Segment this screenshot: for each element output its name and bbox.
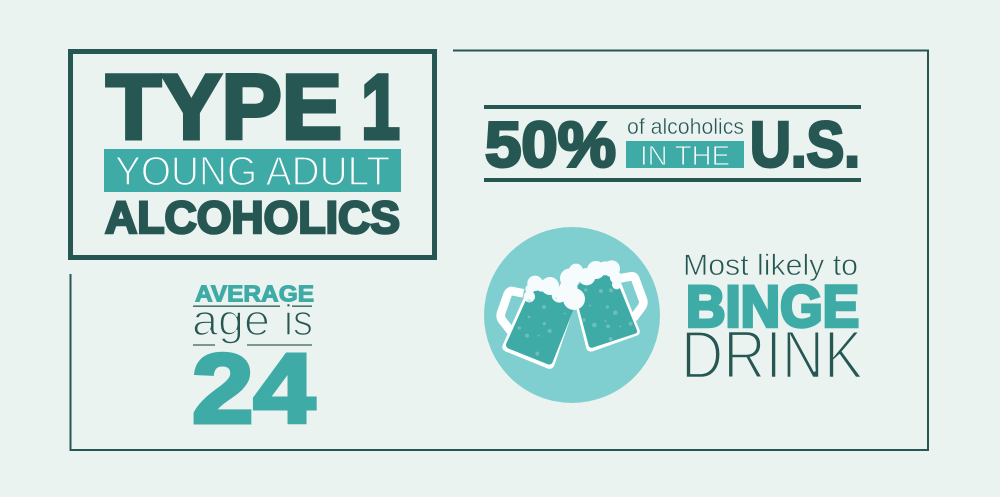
panel: average age xyxy=(192,280,315,444)
icon part: left mug xyxy=(501,287,578,369)
panel: type 1 title box xyxy=(70,52,434,258)
text: age is: is xyxy=(284,296,313,345)
text: age is xyxy=(192,296,313,345)
banner: young adult: YOUNG ADULT xyxy=(115,148,390,194)
heading: TYPE 1: TYPE xyxy=(106,56,342,158)
heading: TYPE 1: 1 xyxy=(361,56,400,158)
text: of alcoholics: of alcoholics xyxy=(627,114,744,139)
stat: 24: 24 xyxy=(192,334,315,444)
banner: in the: IN THE xyxy=(640,140,730,171)
panel: 50 percent statistic xyxy=(484,105,861,182)
icon part: foam xyxy=(524,260,622,310)
stat: 50%: 50% xyxy=(485,108,616,180)
panel: binge drink text xyxy=(681,249,863,393)
heading: alcoholics: ALCOHOLICS xyxy=(105,192,400,243)
text: most likely to: Most likely to xyxy=(683,249,858,282)
heading: average: AVERAGE xyxy=(195,280,314,306)
heading: binge: BINGE xyxy=(686,274,859,340)
icon: clinking beer mugs xyxy=(484,227,660,403)
icon part: right mug xyxy=(572,272,643,352)
heading: drink: DRINK xyxy=(681,317,863,393)
stat: U.S.: U.S. xyxy=(750,108,860,180)
text: age is: age xyxy=(192,296,270,345)
